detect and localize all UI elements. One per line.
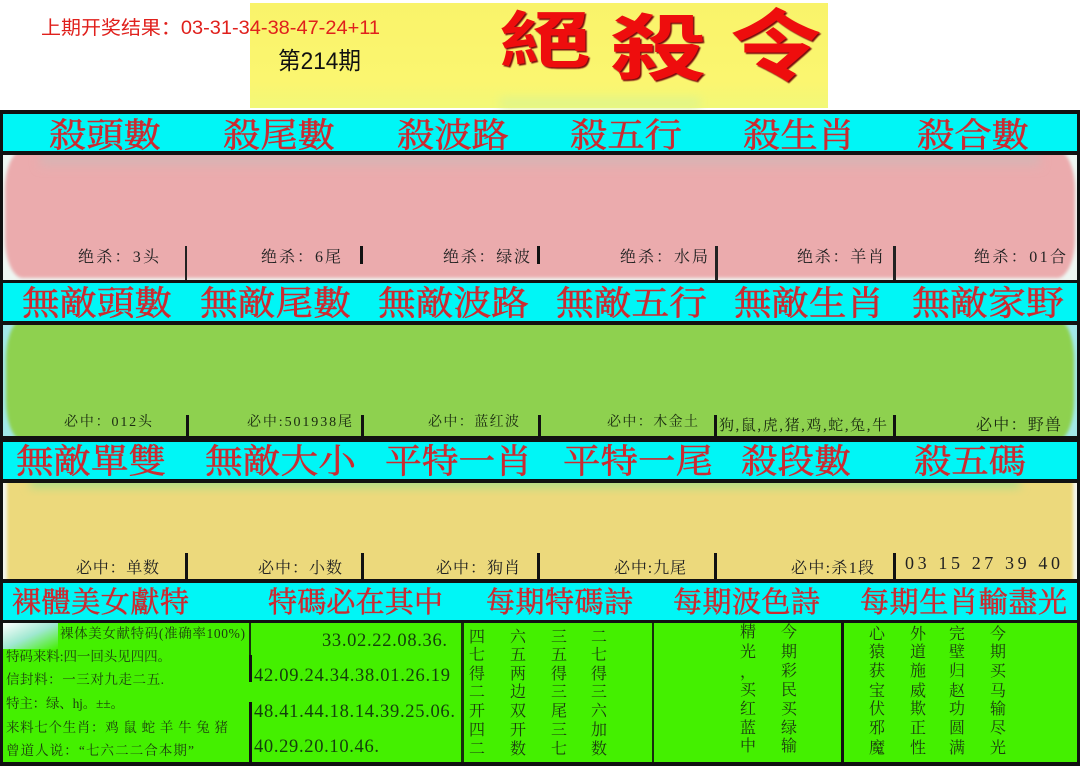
header row 3 (3, 442, 1077, 481)
text block: special code poem: 三 (591, 683, 607, 701)
title (499, 3, 821, 91)
text block: beauty special code: 信封料：一三对九走二五. (6, 671, 164, 687)
text block: zodiac poem: 邪 (869, 719, 885, 737)
text block: zodiac poem: 魔 (869, 739, 885, 757)
text block: wave colour poem: 民 (781, 681, 797, 699)
text block: special numbers: 42.09.24.34.38.01.26.19 (254, 666, 450, 686)
issue number: 第214期 (278, 48, 361, 75)
text block: zodiac poem: 心 (869, 625, 886, 643)
text block: beauty special code: 来料七个生肖：鸡 鼠 蛇 羊 牛 兔 猪 (6, 719, 228, 735)
text block: special code poem: 尾 (551, 702, 567, 720)
text block: zodiac poem (869, 624, 1007, 757)
text block: zodiac poem: 今 (990, 624, 1006, 643)
text block: wave colour poem: 红 (740, 700, 756, 718)
text block: zodiac poem: 宝 (869, 682, 885, 700)
panel: single picks: 必中：狗肖 (436, 559, 520, 577)
text block: special numbers: 48.41.44.18.14.39.25.06. (254, 702, 455, 722)
header row 3: 平特一尾 (563, 443, 713, 481)
text block: special code poem: 四 (469, 629, 485, 646)
header row 4: 每期特碼詩 (486, 586, 633, 619)
text block: zodiac poem: 买 (990, 662, 1007, 680)
text block: zodiac poem: 猿 (869, 643, 885, 661)
panel: must-hit results: 必中：蓝红波 (428, 413, 519, 430)
header row 2: 無敵五行 (556, 285, 707, 323)
header row 4: 特碼必在其中 (268, 586, 443, 619)
text block: zodiac poem: 尽 (990, 719, 1006, 737)
text block: special code poem: 二 (469, 741, 485, 758)
text block: wave colour poem: 买 (740, 681, 757, 699)
header row 4: 裸體美女獻特 (12, 586, 189, 619)
panel: must-hit results (3, 320, 1077, 440)
header row 4 (3, 583, 1077, 620)
text block: special code poem: 三 (551, 721, 567, 739)
panel: must-hit results: 必中:501938尾 (247, 413, 352, 430)
last draw results: 上期开奖结果：03-31-34-38-47-24+11 (41, 17, 380, 39)
header row 1: 殺波路 (397, 117, 509, 155)
text block: beauty special code: 曾道人说：“七六二二合本期” (6, 742, 194, 758)
header row 2 (3, 283, 1077, 323)
text block: zodiac poem: 光 (990, 739, 1006, 757)
header row 2: 無敵頭數 (22, 285, 172, 323)
text block: wave colour poem: 输 (781, 737, 797, 755)
panel: single picks: 必中：小数 (258, 559, 342, 577)
text block: special code poem: 四 (469, 722, 485, 739)
text block: special code poem: 七 (551, 740, 567, 758)
text block: special code poem: 二 (591, 629, 607, 646)
text block: zodiac poem: 圆 (949, 719, 965, 737)
text block: zodiac poem: 归 (949, 662, 965, 680)
text block: zodiac poem: 施 (910, 662, 926, 680)
panel: single picks: 必中：单数 (76, 559, 159, 577)
text block: special code poem (469, 628, 608, 758)
panel: single picks: 必中:杀1段 (791, 559, 874, 577)
text block: beauty special code: 特主：绿、hj。±±。 (6, 695, 124, 711)
header row 1: 殺頭數 (49, 117, 161, 155)
text block: special code poem: 数 (510, 740, 526, 758)
panel: must-hit results: 必中：012头 (64, 413, 153, 430)
panel: kill results: 绝杀：3头 (78, 248, 160, 266)
header row 1: 殺生肖 (743, 117, 855, 155)
panel: single picks (3, 483, 1077, 579)
text block: zodiac poem: 性 (910, 739, 926, 757)
text block: zodiac poem: 期 (990, 643, 1006, 661)
header row 3: 無敵大小 (205, 443, 357, 481)
header row 4: 每期波色詩 (673, 586, 820, 619)
panel: must-hit results: 狗,鼠,虎,猪,鸡,蛇,兔,牛 (719, 416, 887, 434)
text block: special code poem: 三 (551, 683, 567, 701)
text block: special numbers (254, 631, 455, 757)
header row 1: 殺尾數 (223, 117, 335, 155)
header row 2: 無敵尾數 (200, 285, 351, 323)
text block: special code poem: 五 (510, 646, 526, 664)
header row 4: 每期生肖輸盡光 (860, 586, 1067, 619)
text block: beauty special code (6, 625, 245, 758)
text block: wave colour poem: ， (740, 664, 756, 681)
text block: wave colour poem: 今 (781, 622, 797, 641)
header row 2: 無敵生肖 (734, 285, 884, 323)
header row 3: 殺段數 (741, 443, 851, 481)
header row 2: 無敵家野 (912, 285, 1064, 323)
text block: special code poem: 边 (510, 683, 526, 701)
header row 2: 無敵波路 (378, 285, 529, 323)
text block: special code poem: 两 (510, 665, 526, 683)
text block: special code poem: 数 (591, 740, 607, 758)
panel: kill results: 绝杀：01合 (974, 248, 1066, 266)
text block: special code poem: 得 (469, 665, 485, 683)
text block: special code poem: 七 (469, 646, 485, 664)
header row 3: 無敵單雙 (16, 443, 166, 481)
panel: bottom text area (3, 622, 1077, 762)
text block: special code poem: 六 (510, 628, 527, 646)
text block: wave colour poem: 精 (740, 623, 756, 641)
text block: special code poem: 得 (551, 665, 567, 683)
title: 令 (730, 3, 821, 91)
text block: zodiac poem: 马 (990, 682, 1006, 700)
title banner background (250, 3, 828, 108)
text block: zodiac poem: 获 (869, 661, 885, 680)
panel: kill results: 绝杀：绿波 (443, 248, 530, 266)
header row 3: 平特一肖 (385, 443, 532, 481)
text block: zodiac poem: 壁 (949, 643, 965, 661)
panel: kill results: 绝杀：6尾 (261, 248, 341, 266)
text block: special code poem: 双 (510, 702, 526, 720)
text block: zodiac poem: 正 (910, 719, 926, 737)
text block: wave colour poem: 期 (781, 643, 797, 661)
header row 1: 殺五行 (570, 117, 682, 155)
header row 1: 殺合數 (917, 117, 1029, 155)
panel: kill results: 绝杀：羊肖 (797, 248, 884, 266)
text block: wave colour poem: 绿 (781, 719, 797, 737)
text block: wave colour poem (740, 622, 798, 755)
text block: beauty special code: 特码来料:四一回头见四四。 (6, 648, 171, 664)
title: 絕 (499, 7, 591, 76)
header row 1 (3, 114, 1077, 155)
text block: wave colour poem: 买 (781, 700, 798, 718)
panel: must-hit results: 必中：木金土 (607, 413, 698, 430)
title: 殺 (610, 10, 706, 90)
text block: beauty special code: 裸体美女献特码(准确率100%) (60, 625, 245, 641)
text block: special code poem: 加 (591, 721, 607, 739)
panel: kill results: 绝杀：水局 (620, 248, 708, 266)
text block: zodiac poem: 输 (990, 700, 1006, 718)
text block: wave colour poem: 蓝 (740, 718, 756, 737)
panel: single picks: 必中:九尾 (614, 559, 686, 577)
text block: zodiac poem: 道 (910, 643, 926, 661)
text block: zodiac poem: 赵 (949, 682, 965, 700)
text block: special code poem: 七 (591, 646, 607, 664)
text block: wave colour poem: 光 (740, 643, 756, 661)
text block: special code poem: 六 (591, 702, 608, 720)
text block: zodiac poem: 满 (949, 739, 965, 757)
text block: zodiac poem: 欺 (910, 700, 926, 718)
text block: zodiac poem: 威 (910, 682, 926, 700)
text block: special code poem: 三 (551, 628, 567, 646)
text block: zodiac poem: 完 (949, 625, 965, 643)
text block: special code poem: 二 (469, 684, 485, 701)
text block: special numbers: 40.29.20.10.46. (254, 737, 379, 757)
text block: zodiac poem: 外 (910, 625, 927, 643)
panel: single picks: 03 15 27 39 40 (905, 553, 1060, 573)
text block: zodiac poem: 功 (949, 700, 965, 718)
text block: special code poem: 开 (510, 721, 526, 739)
text block: special code poem: 五 (551, 646, 567, 664)
header row 3: 殺五碼 (914, 443, 1026, 481)
panel: kill results (3, 150, 1077, 280)
text block: special numbers: 33.02.22.08.36. (322, 631, 447, 651)
text block: wave colour poem: 中 (740, 737, 756, 755)
text block: zodiac poem: 伏 (869, 700, 885, 718)
text block: wave colour poem: 彩 (781, 662, 797, 680)
text block: special code poem: 得 (591, 665, 607, 683)
text block: special code poem: 开 (469, 702, 485, 720)
panel: must-hit results: 必中：野兽 (976, 416, 1061, 434)
